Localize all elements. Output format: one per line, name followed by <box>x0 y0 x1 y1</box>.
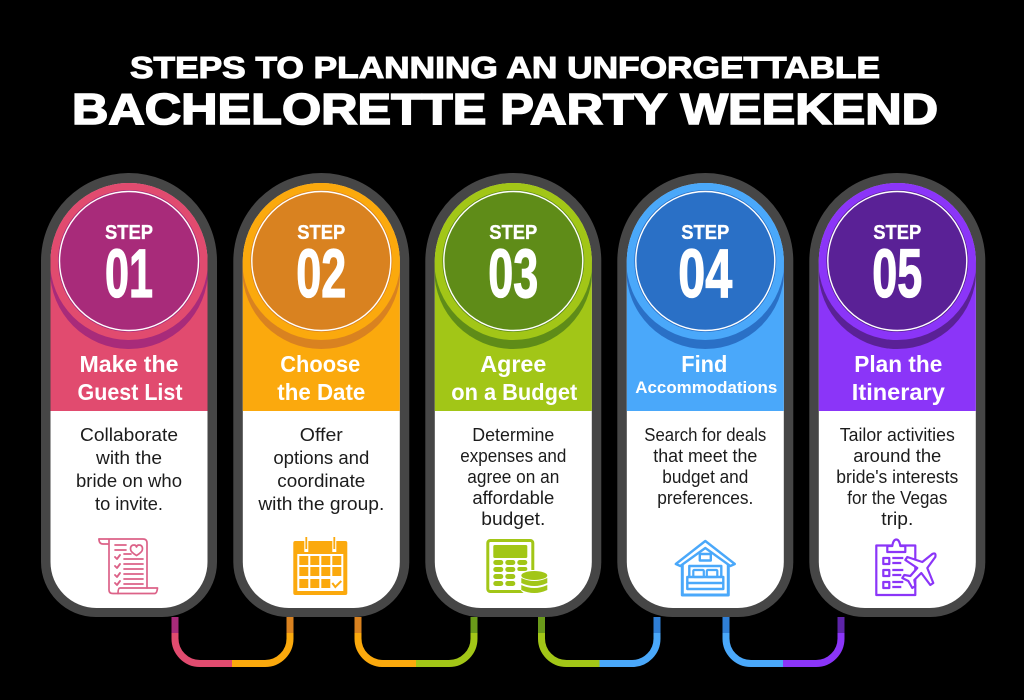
description: Collaborate <box>80 424 178 445</box>
heading: the Date <box>277 379 365 405</box>
description: budget. <box>481 509 545 529</box>
description <box>644 425 766 508</box>
heading <box>635 351 777 397</box>
description: with the group. <box>257 493 384 514</box>
panel: step 4 <box>617 173 793 617</box>
description <box>76 424 182 514</box>
title <box>72 50 938 134</box>
step badge <box>634 190 776 332</box>
description: budget and <box>662 467 748 487</box>
step badge: STEP <box>489 221 537 244</box>
heading <box>852 351 945 405</box>
step badge <box>826 190 968 332</box>
heading: Find <box>681 351 727 377</box>
step badge <box>58 190 200 332</box>
connector: step 4 to step 5 <box>726 617 841 664</box>
description <box>257 424 384 514</box>
description: options and <box>273 447 369 468</box>
description: that meet the <box>653 446 757 466</box>
description: Offer <box>300 424 343 445</box>
step badge <box>442 190 584 332</box>
description: around the <box>853 446 941 466</box>
step badge: 03 <box>488 235 538 312</box>
heading: Agree <box>480 351 546 377</box>
heading: on a Budget <box>451 379 578 405</box>
description: Tailor activities <box>840 425 955 445</box>
step badge: 01 <box>105 235 153 312</box>
description <box>460 425 566 529</box>
heading <box>451 351 578 405</box>
heading <box>78 351 183 405</box>
description: bride's interests <box>836 467 958 487</box>
description: trip. <box>881 509 913 529</box>
description: coordinate <box>277 470 365 491</box>
title: BACHELORETTE PARTY WEEKEND <box>72 85 938 134</box>
step badge: STEP <box>681 221 729 244</box>
description: Search for deals <box>644 425 766 445</box>
heading: Accommodations <box>635 378 777 397</box>
icon: calculator and coins <box>488 540 549 595</box>
connector: step 3 to step 4 <box>541 617 657 664</box>
icon: calendar <box>293 537 347 595</box>
step badge: STEP <box>297 221 345 244</box>
step badge: 04 <box>678 235 732 312</box>
description: bride on who <box>76 470 182 491</box>
panel: step 5 <box>809 173 985 617</box>
title: STEPS TO PLANNING AN UNFORGETTABLE <box>130 50 880 85</box>
description: for the Vegas <box>847 488 947 508</box>
connector: step 1 to step 2 <box>175 617 290 664</box>
description: preferences. <box>657 488 753 508</box>
description: to invite. <box>95 493 163 514</box>
heading: Guest List <box>78 379 183 405</box>
heading: Itinerary <box>852 379 945 405</box>
panel: step 3 <box>425 173 601 617</box>
description <box>836 425 958 529</box>
panel: step 1 <box>41 173 217 617</box>
icon: guest list scroll <box>99 539 158 594</box>
description: agree on an <box>467 467 559 487</box>
heading: Make the <box>80 351 178 377</box>
description: affordable <box>472 488 554 508</box>
connector: step 2 to step 3 <box>358 617 474 664</box>
heading: Choose <box>280 351 360 377</box>
description: expenses and <box>460 446 566 466</box>
description: Determine <box>472 425 554 445</box>
step badge: 02 <box>296 235 346 312</box>
panel: step 2 <box>233 173 409 617</box>
step badge <box>250 190 392 332</box>
heading <box>277 351 365 405</box>
step badge: 05 <box>872 235 922 312</box>
heading: Plan the <box>854 351 942 377</box>
icon: house with bed <box>676 541 735 595</box>
step badge: STEP <box>105 221 153 244</box>
description: with the <box>95 447 162 468</box>
step badge: STEP <box>873 221 921 244</box>
icon: clipboard and plane <box>876 540 936 595</box>
